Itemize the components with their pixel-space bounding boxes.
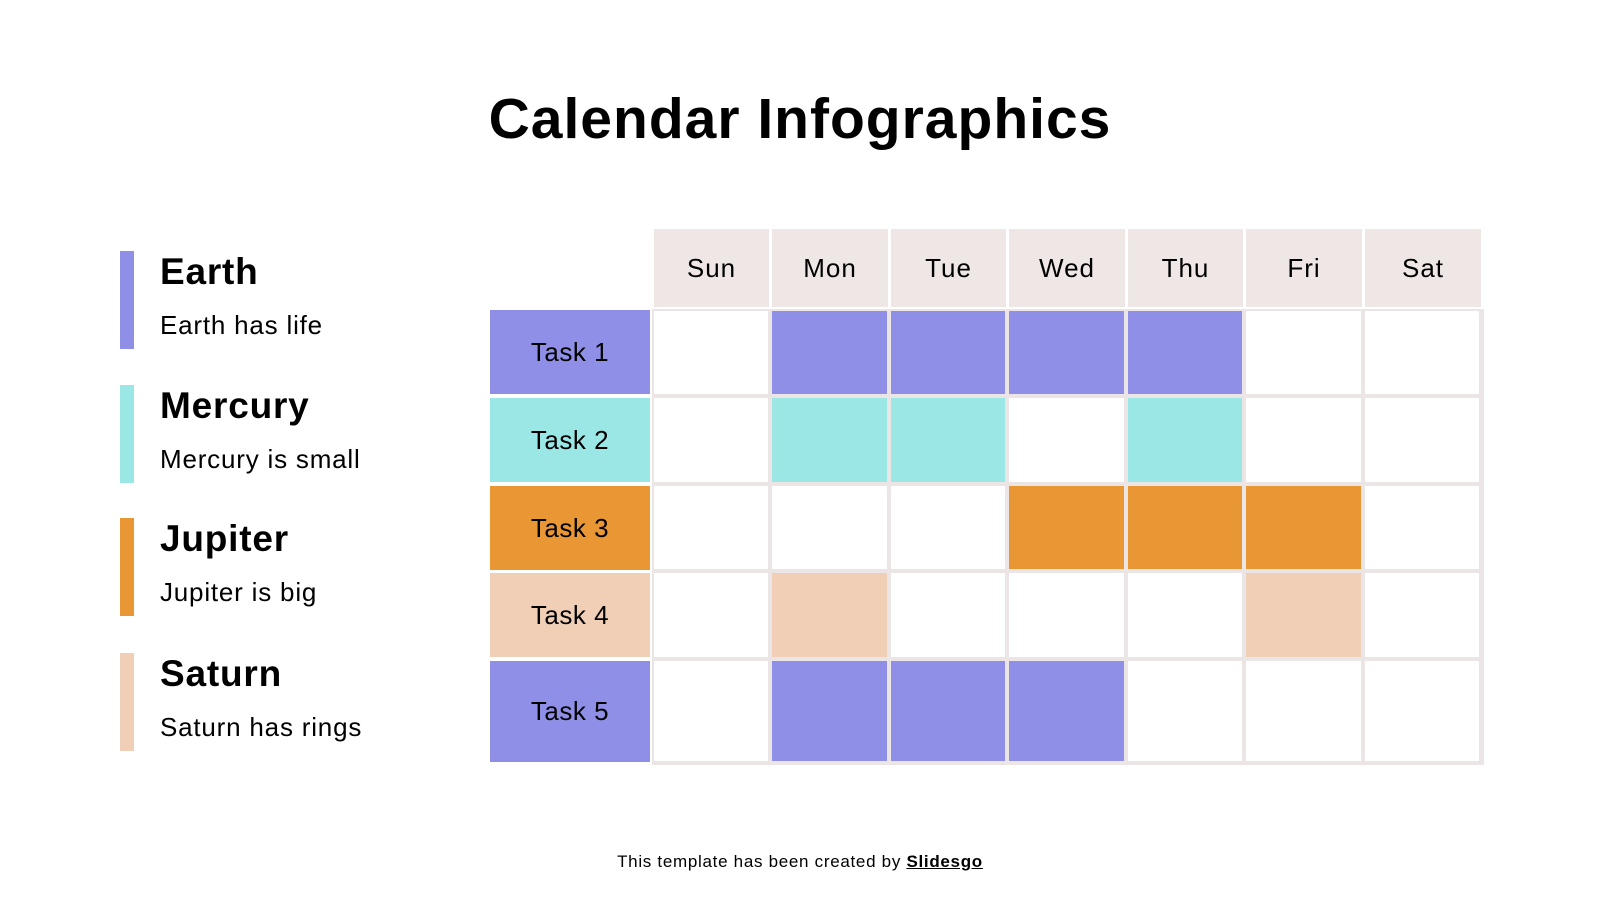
day headers: Wed — [1039, 252, 1095, 282]
task labels: Task 4 — [531, 600, 609, 630]
legend: Mercury — [120, 385, 361, 483]
day headers: Sun — [687, 252, 736, 282]
title: Calendar Infographics — [489, 87, 1111, 151]
heading: Saturn: Saturn — [160, 653, 282, 694]
heading: Jupiter: Jupiter — [160, 518, 289, 559]
legend: Earth — [120, 251, 323, 349]
task labels: Task 1 — [531, 336, 609, 366]
task labels: Task 2 — [531, 424, 609, 454]
day headers: Sat — [1402, 252, 1444, 282]
day headers: Tue — [925, 252, 972, 282]
bar: Jupiter — [120, 518, 134, 616]
task labels — [490, 310, 650, 762]
legend: Jupiter — [120, 518, 317, 616]
day headers: Fri — [1287, 252, 1321, 282]
calendar table — [490, 229, 1484, 765]
task labels: Task 5 — [531, 696, 609, 726]
day headers — [654, 229, 1481, 307]
task labels: Task 3 — [531, 512, 609, 542]
heading: Earth: Earth — [160, 251, 259, 292]
text: Jupiter: Jupiter is big — [160, 577, 317, 607]
bar: Earth — [120, 251, 134, 349]
heading: Mercury: Mercury — [160, 385, 310, 426]
day headers: Thu — [1162, 252, 1209, 282]
grid — [652, 309, 1484, 765]
bar: Saturn — [120, 653, 134, 751]
bar: Mercury — [120, 385, 134, 483]
text: Mercury: Mercury is small — [160, 444, 361, 474]
day headers: Mon — [803, 252, 857, 282]
text: Earth: Earth has life — [160, 310, 323, 340]
text: Saturn: Saturn has rings — [160, 712, 362, 742]
legend: Saturn — [120, 653, 362, 751]
footer credit: This template has been created by Slidesgo — [617, 852, 983, 871]
